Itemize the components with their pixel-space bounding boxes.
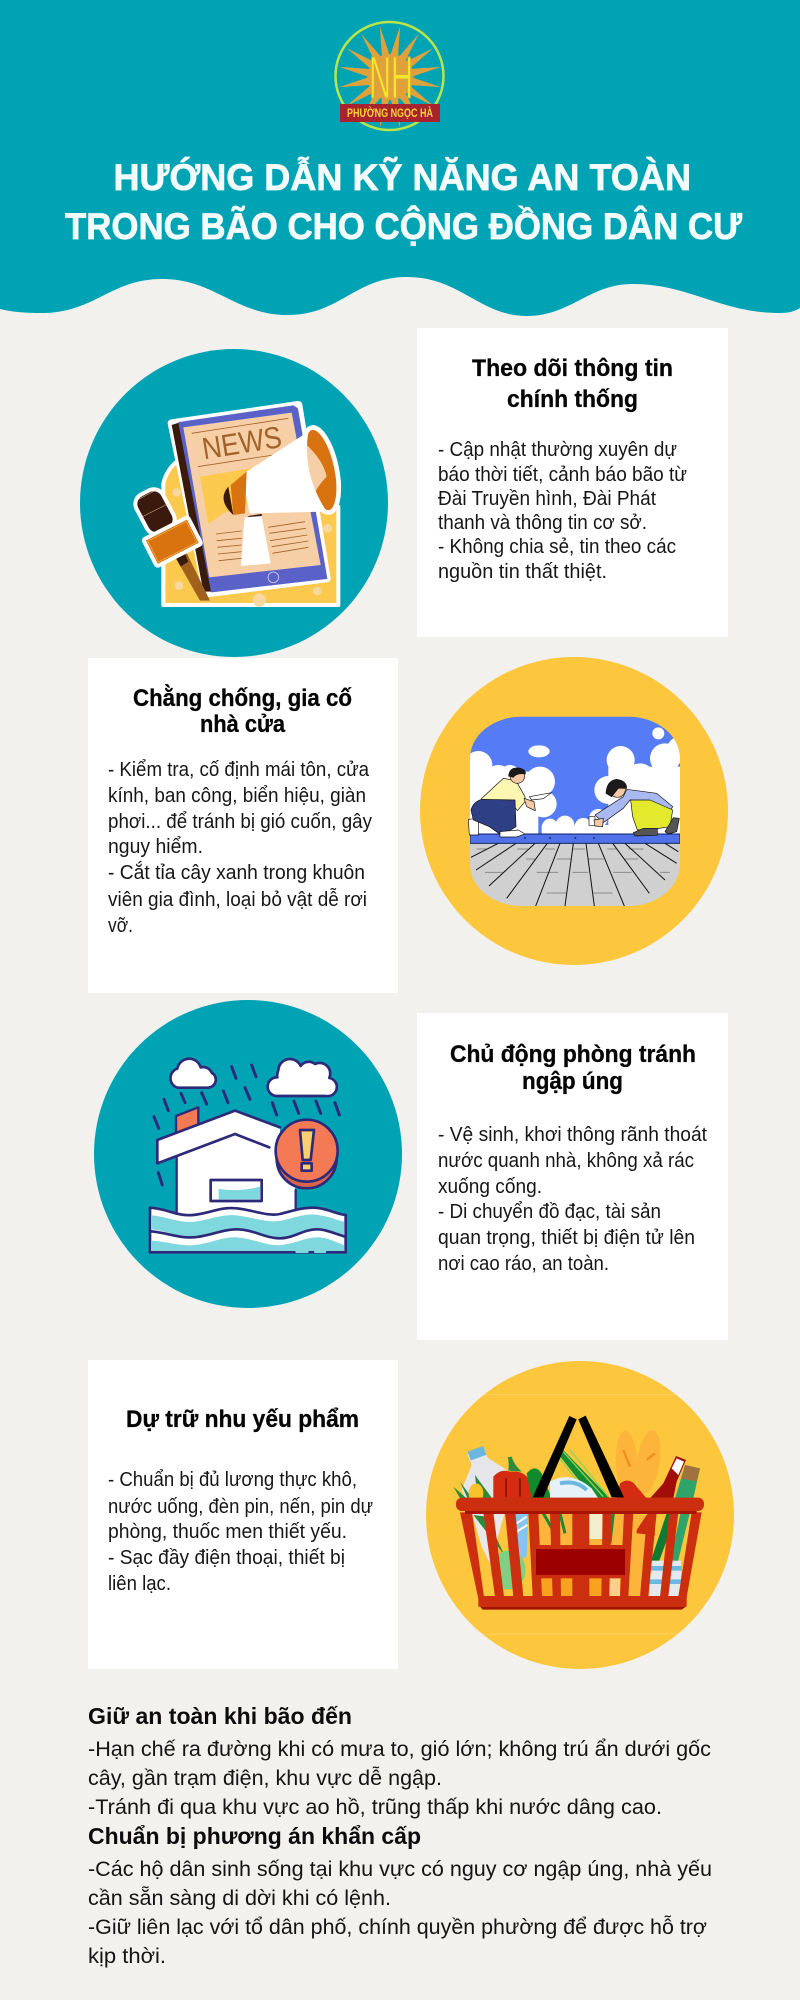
title: TRONG BÃO CHO CỘNG ĐỒNG DÂN CƯ xyxy=(65,205,742,247)
panel: chằng chống, gia cố nhà cửa xyxy=(88,658,398,993)
heading: chằng chống xyxy=(133,684,352,738)
text block: panel 3 body: quan trọng, thiết bị điện tử lên xyxy=(438,1227,695,1249)
panel: dự trữ nhu yếu phẩm xyxy=(88,1360,398,1669)
text block: emergency plan: cần sẵn sàng di dời khi có lệnh. xyxy=(88,1887,391,1910)
text block: emergency plan: kịp thời. xyxy=(88,1945,166,1968)
heading: theo dõi thông tin chính thống: Theo dõi thông tin xyxy=(472,355,673,382)
text block: panel 3 body: nơi cao ráo, an toàn. xyxy=(438,1253,609,1275)
icon: grocery basket in yellow circle xyxy=(426,1361,734,1669)
heading: chằng chống: Chằng chống, gia cố xyxy=(133,684,352,712)
text block: panel 2 body: vỡ. xyxy=(108,915,133,937)
logo: Phường Ngọc Hà: NH xyxy=(369,45,413,111)
text block: panel 4 body: phòng, thuốc men thiết yếu. xyxy=(108,1521,347,1543)
title: HƯỚNG DẪN KỸ NĂNG AN TOÀN xyxy=(114,156,691,198)
text block: panel 2 body xyxy=(108,759,372,937)
icon: flooded house in teal circle xyxy=(94,1000,402,1308)
text block: panel 2 body: phơi... để tránh bị gió cuốn, gây xyxy=(108,811,372,833)
header banner with wave xyxy=(0,0,800,316)
text block: panel 4 body: nước uống, đèn pin, nến, pin dự xyxy=(108,1496,373,1518)
text block: panel 1 body: nguồn tin thất thiệt. xyxy=(438,561,607,583)
text block: emergency plan: -Các hộ dân sinh sống tại khu vực có nguy cơ ngập úng, nhà yếu xyxy=(88,1858,712,1881)
text block: keep safe during the storm: Giữ an toàn khi bão đến xyxy=(88,1703,352,1729)
text block: panel 4 body: - Sạc đầy điện thoại, thiết bị xyxy=(108,1547,345,1569)
text block: panel 1 body: báo thời tiết, cảnh báo bão từ xyxy=(438,464,687,486)
text block: panel 4 body: liên lạc. xyxy=(108,1573,171,1595)
heading: dự trữ: Dự trữ nhu yếu phẩm xyxy=(126,1406,359,1433)
text block: panel 2 body: - Kiểm tra, cố định mái tôn, cửa xyxy=(108,759,370,781)
text block: panel 1 body: Đài Truyền hình, Đài Phát xyxy=(438,488,656,510)
text block: panel 4 body xyxy=(108,1469,373,1595)
text block: panel 3 body xyxy=(438,1124,707,1275)
panel: chủ động phòng tránh ngập úng xyxy=(417,1013,728,1340)
text block: panel 2 body: nguy hiểm. xyxy=(108,836,203,858)
text block: keep safe during the storm xyxy=(88,1703,711,1819)
icon: news and megaphone in teal circle xyxy=(80,349,388,657)
title xyxy=(65,156,742,247)
text block: keep safe during the storm: -Tránh đi qua khu vực ao hồ, trũng thấp khi nước dâng cao. xyxy=(88,1796,662,1819)
text block: panel 3 body: - Vệ sinh, khơi thông rãnh thoát xyxy=(438,1124,707,1146)
text block: panel 3 body: xuống cống. xyxy=(438,1176,542,1198)
text block: keep safe during the storm: cây, gần trạm điện, khu vực dễ ngập. xyxy=(88,1767,442,1790)
text block: panel 3 body: nước quanh nhà, không xả rác xyxy=(438,1150,694,1172)
text block: panel 2 body: viên gia đình, loại bỏ vật dễ rơi xyxy=(108,888,367,911)
heading: chằng chống: nhà cửa xyxy=(200,711,286,738)
panel: theo dõi thông tin xyxy=(417,328,728,637)
heading: theo dõi thông tin chính thống: chính thống xyxy=(507,386,638,413)
logo: Phường Ngọc Hà xyxy=(336,22,444,130)
icon: news and megaphone in teal circle: NEWS xyxy=(200,420,284,466)
text block: panel 2 body: kính, ban công, biển hiệu, giàn xyxy=(108,785,366,807)
text block: emergency plan: Chuẩn bị phương án khẩn cấp xyxy=(88,1823,421,1849)
text block: keep safe during the storm: -Hạn chế ra đường khi có mưa to, gió lớn; không trú ẩn dưới gốc xyxy=(88,1738,711,1761)
text block: emergency plan xyxy=(88,1823,712,1968)
text block: panel 1 body: - Cập nhật thường xuyên dự xyxy=(438,439,677,461)
heading: chủ động: Chủ động phòng tránh xyxy=(450,1041,696,1068)
text block: panel 1 body: - Không chia sẻ, tin theo các xyxy=(438,536,676,558)
text block: panel 4 body: - Chuẩn bị đủ lương thực khô, xyxy=(108,1469,357,1491)
text block: emergency plan: -Giữ liên lạc với tổ dân phố, chính quyền phường để được hỗ trợ xyxy=(88,1916,707,1939)
logo: Phường Ngọc Hà: PHƯỜNG NGỌC HÀ xyxy=(347,105,433,120)
icon: workers fixing roof in yellow circle xyxy=(420,657,728,965)
text block: panel 1 body: thanh và thông tin cơ sở. xyxy=(438,512,647,534)
heading: theo dõi thông tin chính thống xyxy=(472,355,673,413)
text block: panel 1 body xyxy=(438,439,687,583)
heading: chủ động: ngập úng xyxy=(522,1068,623,1095)
text block: panel 3 body: - Di chuyển đồ đạc, tài sản xyxy=(438,1201,661,1223)
text block: panel 2 body: - Cắt tỉa cây xanh trong khuôn xyxy=(108,861,365,884)
heading: chủ động xyxy=(450,1041,696,1095)
